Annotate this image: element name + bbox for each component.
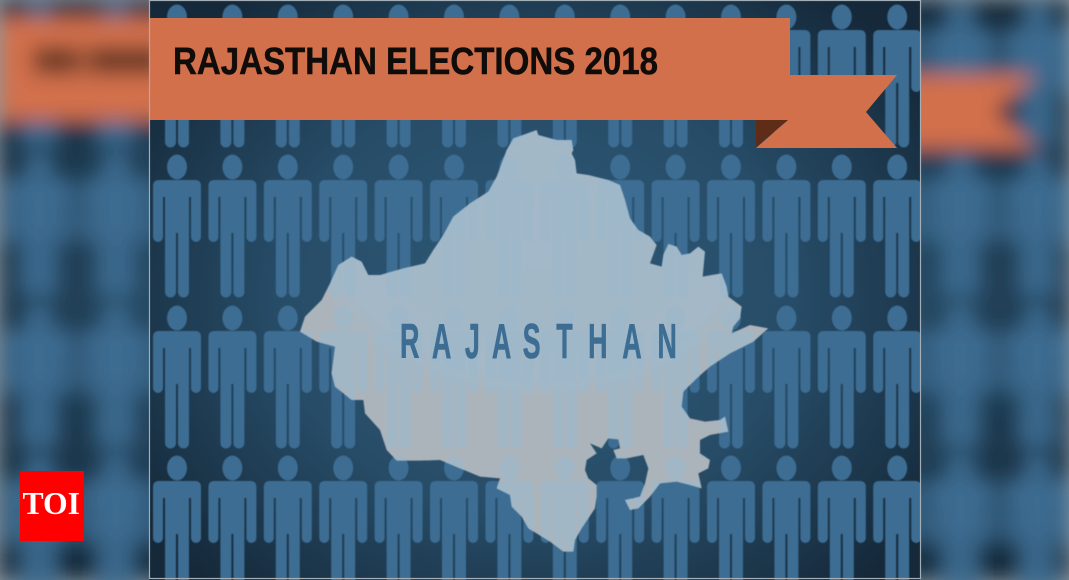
title banner bbox=[149, 18, 790, 120]
map label: RAJASTHAN bbox=[400, 315, 677, 369]
map of Rajasthan bbox=[300, 130, 768, 552]
image frame bbox=[150, 0, 920, 578]
main image panel bbox=[149, 0, 921, 580]
ribbon fold bbox=[756, 120, 788, 147]
TOI logo: TOI bbox=[22, 485, 80, 521]
TOI logo bbox=[20, 471, 84, 541]
crowd of people icons bbox=[153, 4, 921, 580]
title: RAJASTHAN ELECTIONS 2018 bbox=[173, 41, 658, 83]
panel background bbox=[149, 0, 920, 580]
ribbon tail bbox=[756, 75, 897, 148]
